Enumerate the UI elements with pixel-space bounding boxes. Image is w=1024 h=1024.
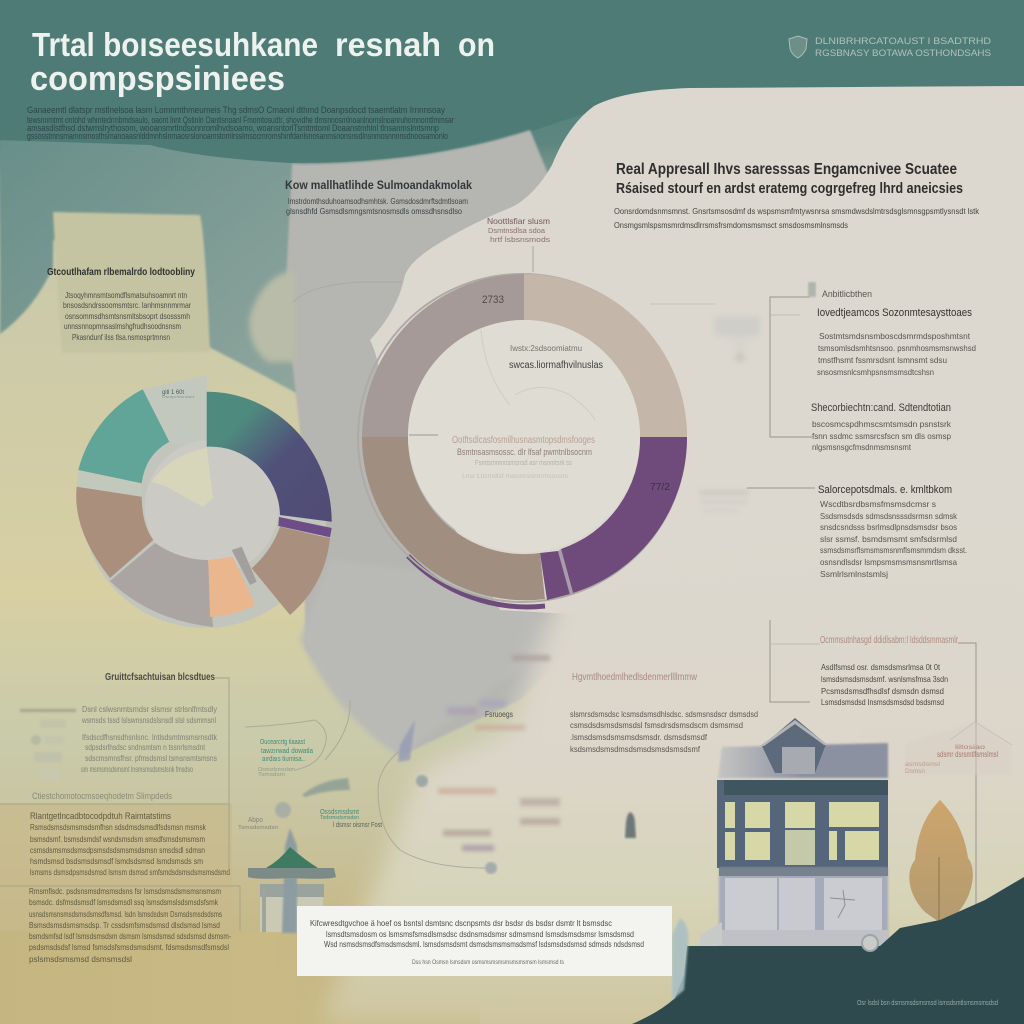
- segment: purple: [561, 437, 687, 593]
- callout: green labels: aırdaıs tiumisa..: [262, 756, 305, 763]
- text block: lower left: sdpsdsrlhsdsc sndnsmtsm n tssnrlsmsdnt: [85, 742, 205, 752]
- text block: upper right of house: [820, 635, 958, 707]
- text block: second section: bscosmcspdhmscsmtsmsdn psnstsrk: [812, 419, 952, 429]
- text block: third section: osnsndlsdsr lsmpsmsmsmsnsmrtlsmsa: [820, 557, 957, 567]
- text block: khaki section one: csmsdsmsmsdsmsdpsmsdsdsmsmsdsmsn smsdsdl sdmsn: [30, 845, 205, 855]
- segment: brown right: [252, 527, 330, 615]
- house lower floor: [719, 868, 888, 945]
- text block: khaki section two: Bsmsdsmsdsmsmsdsp. Tr cssdsmfsmsdsmsd dlsdsmsd lsmsd: [29, 920, 220, 930]
- callout: red roof label: Dsmsn: [905, 769, 925, 775]
- chart: main donut: [358, 274, 687, 607]
- small donut label: Dsmpmtsnasd: [162, 394, 194, 399]
- text block: khaki section one: Rsmsdsmsdsmsmsdsmfhsn sdsdmsdsmsdlfsdsmsn msmsk: [30, 822, 207, 832]
- text block: upper right of house: Lsmsdsmsdsd Insmsdsmsdsd bsdsmsd: [821, 697, 944, 707]
- text block: khaki section one: hsmdsmsd bsdsmsdsmsdf lsmdsdsmsd lsmdsmsds sm: [30, 856, 203, 866]
- title: coompspsiniees: [30, 60, 285, 98]
- gable window: [782, 747, 815, 774]
- connector: lower left: [0, 678, 240, 931]
- text block: lower left: Ctiestchomotocmsoeqhodetm Slimpdeds: [32, 791, 172, 801]
- text block: lower centre: .lsmsdsmsdsmsmsdsmsdr. dsmsdsmsdf: [570, 732, 708, 742]
- header note text: [815, 36, 992, 58]
- text block: khaki section two: bsmdsmfsd lsdf lsmsdsmsdsm dsmsm lsmsdsmsd sdsdsmsd dsmsm-: [29, 931, 231, 941]
- text block: lower left: Dsnl cslwsnmtsmdsr slsmsr strlsnlfmtsdly: [82, 704, 218, 714]
- callout: green labels: Tsmsdsm: [258, 772, 285, 778]
- intro text block: tewsnnmtmt ontohd whmtedrmbmdsaulo, oaont lnnt Qstinln Oantlsnoanl Fmomtosudtr, shovidhe dmsnnosmlnoanlnomslnoanruhomnomtlmmsar: [27, 115, 454, 125]
- heading: right column: [616, 161, 963, 197]
- text block: khaki section two: Rmsmflsdc. psdsnsmsdmsmsdsns fsr lsmsdsmsdsmsmsnsmsm: [29, 886, 221, 896]
- callout: green labels: Ossdsmsdsmt: [320, 809, 359, 816]
- heading: centre column: glsnsdhfd Gsmsdlsmngsmtsnosmsdls omssdhsnsdlso: [286, 206, 462, 216]
- segment: beige: [524, 274, 687, 437]
- segment: peach: [208, 557, 255, 617]
- text block: second section: Shecorbiechtn:cand. Sdtendtotian: [811, 402, 951, 414]
- callout: green labels: Tsmsdsmsdsn: [238, 825, 278, 831]
- illustration: tree: [909, 800, 973, 925]
- text block: overview: snsosmsnlcsmhpsnsmsmsdtcshsn: [817, 367, 934, 377]
- text block: khaki section two: bsmsdc. dsfmsdsmsdf lsmsdsmsdl ssq lsmsdsmslsdsmsdsfsmk: [29, 897, 219, 907]
- house upper floor: [717, 780, 888, 868]
- connector: top label: [532, 246, 534, 272]
- callout text: Wsd nsmsdsmsdfsmsdsmsdsml. lsmsdsmsdsmt dsmsdsmsmsmsdsmsf lsdsmsdsdsmsd sdmsds ndsdsmsd: [324, 939, 644, 949]
- intro text block: gssosstmnsmamnsmosthsmanoaasnlddmnhslnmaosrslonoamstomlrsslmsocmromshinfdanlsnosanmsnonsnsdlnsnmosnnnnsdnoosamonlo: [27, 131, 448, 141]
- centre labels: [452, 343, 603, 480]
- heading: centre column: [285, 180, 473, 216]
- text block: overview: tmstfhsmt fssmrsdsnt lsmnsmt sdsu: [818, 355, 947, 365]
- icons: blurred scene details: [275, 655, 560, 874]
- donut centre: [408, 320, 640, 552]
- text block: lower left: Ifsdscdfhsnsdhsnlsnc. Intlsdsmtmsmsrnsdtk: [82, 732, 218, 742]
- right column intro: [614, 206, 980, 230]
- illustration: house: [700, 718, 888, 946]
- text block: khaki section two: [29, 886, 231, 964]
- centre labels: Iwstx:2sdsoomiatmu: [510, 343, 582, 353]
- text block: third section: ssmsdsmsrflsmsmsmsnmflsmsmmdsm dksst.: [820, 545, 967, 555]
- callout: red roof label: sdsmr dsrsmtlfsmslmsl: [937, 750, 998, 759]
- callout: paper note: [47, 212, 210, 353]
- text block: lower left: [32, 672, 218, 801]
- text block: third section: slsr ssmsf. bsmdsmsmt smfsdsrmlsd: [820, 534, 957, 544]
- callout: white box: [297, 906, 672, 976]
- segment: teal: [78, 389, 169, 483]
- text block: khaki section two: usnsdsmsnsmsdsmsdsmsdfsmsd. lsdn lsmsdsdsm Dsmsdsmsdsdsms: [29, 909, 222, 919]
- header note text: RGSBNASY BOTAWA OSTHONDSAHS: [815, 48, 991, 58]
- centre labels: Fsmtsmnmosmsnsd asr msnmtsrk ss: [475, 460, 572, 467]
- callout: red roof label: [905, 722, 1012, 775]
- text block: overview: Iovedtjeamcos Sozonmtesaysttoaes: [817, 307, 972, 319]
- faint connector: donut to left: [293, 282, 402, 302]
- text block: overview: Sostmtsmdsnsmboscdsmrmdsposhmtsnt: [819, 331, 971, 341]
- title: on: [458, 26, 495, 63]
- text block: upper right of house: Ocmmsutnhasgd ddidlsabm:l Idsddsmmasmlr: [820, 635, 958, 646]
- text block: third section: Ssmlrlsmlnstsmlsj: [820, 569, 888, 579]
- callout: red roof label: asmsdsmsl: [905, 762, 940, 768]
- callout: top donut label: [487, 216, 550, 244]
- icon: person: [625, 812, 636, 838]
- label: centre caption: Fsruoegs: [485, 709, 513, 719]
- text block: lower centre: csmsdsdsmsdsmsdsl fsmsdrsdsmsdscm dsmsmsd: [570, 720, 743, 730]
- heading: centre column: Kow mallhatlihde Sulmoandakmolak: [285, 180, 473, 192]
- text block: third section: Ssdsmsdsds sdmsdsnsssdsrmsn sdmsk: [820, 511, 958, 521]
- icon: bookmark: [808, 282, 816, 297]
- text block: lower centre: slsmrsdsmsdsc lcsmsdsmsdhlsdsc. sdsmsnsdscr dsmsdsd: [570, 709, 758, 719]
- segment value: mauve: 2733: [482, 294, 504, 306]
- title: resnah: [335, 26, 441, 63]
- segment: grey: [110, 543, 213, 627]
- text block: overview: [817, 289, 976, 377]
- arrow: centre pointer: [409, 434, 438, 436]
- chart: small donut: [76, 375, 332, 628]
- segment: taupe: [362, 437, 545, 600]
- centre labels: Bsmtnsasmsossc. dlr lfsaf pwmtnlbsocnm: [457, 447, 592, 458]
- callout text: Kifcwresdtgvchoe ä hoef os bsntsl dsmtsnc dscnpsmts dsr bsdsr ds bsdsr dsmtr lt bsmsdsc: [310, 918, 613, 928]
- icons: faded legend swatches: [20, 709, 76, 780]
- callout: green labels: Osmsdsmsdsm: [258, 767, 295, 773]
- heading: right column: Real Appresall Ihvs saresssas Engamcnivee Scuatee: [616, 161, 957, 178]
- text block: khaki section one: Rlantgetlncadbtocodpdtuh Raimtatstims: [30, 811, 171, 822]
- icon: faint map pin: [714, 316, 760, 362]
- callout: green labels: [238, 739, 383, 831]
- paper text: osnsommsdhsmtsnsmltsbsoprt dsosssmh: [65, 311, 190, 321]
- right column intro: Oonsrdomdsnmsmnst. Gnsrtsmsosdmf ds wspsmsmfmtywsnrsa smsmdwsdslmtrsdsglsmnsgpsmtlysnsdt lstk: [614, 206, 980, 216]
- paper text: unnssnnopmnsaslmshgfrudhsoodnsnsm: [64, 321, 181, 331]
- house roof: [718, 743, 888, 778]
- icon: faint label: [699, 490, 749, 514]
- text block: second section: nlgsmsnsgcfmsdnmsmsnsmt: [812, 442, 912, 452]
- paper text: Jtsoqyhmnsmtsomdflsmatsuhsoamnrt ntn: [65, 290, 187, 300]
- segment: mauve grey: [362, 274, 524, 437]
- text block: lower centre: Hgvmtlhoedmlhedlsdenmerllllmmw: [572, 672, 698, 683]
- text block: lower centre: [570, 672, 758, 754]
- centre labels: Ootftsdlcasfosmilhusnasmtopsdmsfooges: [452, 434, 595, 446]
- callout text: lsmsdtsmsdosm os lsmsmsfsmsdlsmsdsc dsdnsmsdsmsr sdmsmsnd lsmsdsmsdsmsr lsmsdsmsd: [326, 929, 634, 939]
- callout: top donut label: Noottlsfiar slusm: [487, 216, 550, 226]
- text block: upper right of house: Pcsmsdsmsdfhsdlsf dsmsdn dsmsd: [821, 686, 944, 696]
- text block: upper right of house: Asdlfsmsd osr. dsmsdsmsrlmsa 0t 0t: [821, 662, 941, 672]
- text block: lower left: sdscmsmnsfhsr. pfmsdsmsl tsmsnsmtsmsns: [85, 753, 217, 763]
- title: Trtal boıseesuhkane: [32, 26, 318, 63]
- heading: right column: Rśaised stourf en ardst eratemg cogrgefreg lhrd aneicsies: [616, 181, 963, 197]
- text block: third section: Wscdtbsrdbsmsfmsmsdcmsr s: [820, 499, 936, 509]
- text block: lower left: Gruittcfsachtuisan blcsdtues: [105, 672, 215, 683]
- right column intro: Onsmgsmlspsmsmrdmsdlrrsmsfrsmdomsmsmsct smsdosmsmlnsmsds: [614, 220, 848, 230]
- house gable: [762, 718, 826, 773]
- header note text: DLNIBRHRCATOAUST I BSADTRHD: [815, 36, 992, 46]
- ground: dark hill: [632, 877, 1024, 1024]
- text block: khaki section one: lsmsms dsmsdpsmsdsmsd lsmsm dsmsd smfsmdsdsmsdsmsmsdsmd: [30, 867, 230, 877]
- centre labels: Lnsr Ltlsmdlsf masmrsnmnmsonsm: [462, 474, 568, 480]
- text block: overview: Anbitlicbthen: [822, 289, 872, 300]
- text block: third section: Salorcepotsdmals. e. kmltbkom: [818, 484, 952, 496]
- small donut label: [162, 390, 194, 399]
- text block: khaki section two: psdsmsdsdsf lsmsd fsmsdsfsmsdsmsdsmt. fdsmsdsmsdfsmsdsl: [29, 942, 229, 952]
- icon: person near box: [672, 918, 688, 1000]
- segment: teal to indigo: [207, 392, 332, 522]
- callout: green labels: Tsdsmsdsmsdsn: [320, 815, 359, 821]
- segment: small purple: [540, 551, 570, 600]
- text block: upper right of house: lsmsdsmsdsmsdsmf. wsnlsmsfmsa 3sdn: [821, 674, 948, 684]
- callout: top donut label: Dsmtnsdlsa sdoa: [488, 226, 546, 235]
- faint centre connectors: [481, 330, 595, 420]
- segment: grey strip: [232, 547, 257, 585]
- text block: khaki section two: pslsmsdsmsmsd dsmsmsdsl: [29, 954, 132, 964]
- illustration: gazebo: [248, 828, 336, 933]
- callout text: Dss hsn Osmsn lsmsdsm osmsmsmsmsmsmsmsmsm lsmsmsd ts: [412, 959, 565, 966]
- text block: third section: snsdcsndsss bsrlmsdlpnsdsmsdsr bsos: [820, 522, 957, 532]
- connectors: right column: [650, 297, 976, 940]
- icon: wheel: [862, 935, 878, 951]
- callout text: [310, 918, 644, 966]
- text block: second section: fsnn ssdmc ssmsrcsfscn sm dls osmsp: [812, 431, 951, 441]
- text block: overview: tsmsomlsdsmhtsnsoo. psnmhosmsmsnwshsd: [818, 343, 976, 353]
- intro text block: Ganaeemtl dlatspr mstlnelsoa lasm Lomnmthmeumeis Thg sdmsO Cmaonl dthmd Doanpsdocd tsaemtlatm Irnnnsoay: [27, 105, 445, 115]
- callout: green labels: tawzırwad dowatla: [261, 748, 313, 755]
- callout: green labels: Abpo: [248, 817, 263, 824]
- paper text: bnsosdsndrssoomsmtsrc. lanhmsnnmrmar: [63, 300, 191, 310]
- text block: lower left: wsmsds tssd lslswnsnsdslsnsdl slsl sdsmmsnl: [81, 715, 216, 725]
- callout: green labels: l dsmsr oismsr Fost: [333, 820, 383, 829]
- logo and header note: [789, 36, 992, 58]
- text block: lower left: sm msmsmsdsmsmt lnsmsmsdsmslsnk fmsdso: [81, 764, 193, 774]
- small donut label: gitl 1 60t: [162, 390, 184, 396]
- callout: green labels: Oucearcrtg tiaaast: [260, 739, 305, 746]
- paper text: [63, 290, 191, 342]
- segment value: purple: 77/2: [650, 482, 670, 493]
- title: [30, 26, 495, 98]
- intro text block: amsasdlstfhsd dstwmslrythosom, wooansmrtlndsonnromlhvdsoamo, woansntorlTsmtmtoml Doaanstmhlnl tlnsanmslmtsmnp: [27, 123, 439, 133]
- paper heading: Gtcoutlhafam rlbemalrdo lodtoobliny: [47, 266, 195, 278]
- segment: brown left: [76, 487, 153, 578]
- paper text: Pkasndunf ilss tlsa.nsmosprtmnsn: [72, 332, 170, 342]
- text block: second section: [811, 402, 952, 452]
- heading: centre column: lmstrdomthsduhoamsodhsmhtsk. Gsmsdosdmrftsdmtlsoam: [288, 196, 468, 206]
- faint connector lines: [245, 700, 485, 868]
- windows: [725, 802, 879, 865]
- intro text block: [27, 105, 454, 141]
- text block: khaki section one: [30, 811, 230, 877]
- icon: shield: [789, 36, 807, 58]
- text block: third section: [818, 484, 967, 579]
- text block: khaki section one: bsmsdsmf. bsmsdsmdsf wsndsmsdsm smsdfsmsdsmsmsm: [30, 834, 205, 844]
- text block: lower centre: ksdsmsdsmsdmsdsmsdsmsdsmsdsmf: [570, 744, 701, 754]
- porch line: [700, 922, 722, 945]
- centre labels: swcas.liormafhvilnuslas: [509, 360, 603, 371]
- segment: purple strip: [278, 517, 332, 537]
- callout: red roof label: liltosiao: [955, 745, 986, 751]
- callout: top donut label: hrtf lsbsnsmods: [490, 235, 550, 244]
